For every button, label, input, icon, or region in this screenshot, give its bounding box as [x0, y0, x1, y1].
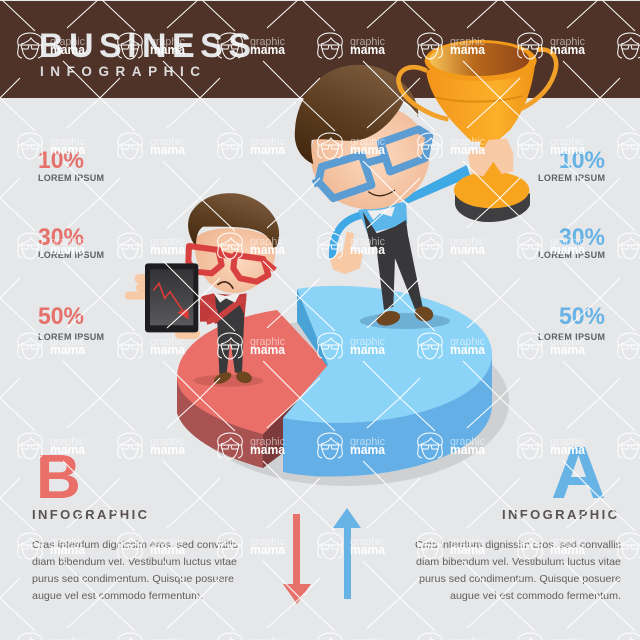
left stats: red: 10%: [38, 147, 84, 174]
section A text: augue vel est commodo fermentum.: [450, 590, 621, 602]
small boy shoes: [212, 370, 253, 386]
trophy base black: [455, 193, 530, 222]
trophy base gold: [454, 172, 529, 208]
small boy collar: [213, 293, 240, 303]
section B text: Cras interdum dignissim eros, sed convallis: [32, 539, 238, 551]
small boy sweater: [200, 293, 247, 324]
trophy cup rim: [425, 40, 537, 81]
right stats: blue: [538, 147, 605, 342]
small boy vest: [215, 295, 244, 324]
left stats: red: LOREM IPSUM: [38, 332, 104, 342]
big boy shadow: [360, 313, 450, 329]
big boy collar: [367, 207, 395, 220]
left stats: red: 30%: [38, 224, 84, 251]
right stats: blue: LOREM IPSUM: [538, 332, 605, 342]
small boy with tablet: [125, 193, 279, 387]
big boy head: [295, 65, 429, 209]
small boy head: [188, 193, 279, 293]
big boy face: [311, 104, 429, 209]
section A text: [415, 539, 621, 602]
section A text: diam bibendum vel. Vestibulum luctus vitae: [416, 556, 621, 568]
blue slice inner wall: [297, 289, 330, 368]
section A heading: INFOGRAPHIC: [502, 507, 618, 522]
trophy stem: [480, 137, 503, 174]
arrow: down red: [283, 514, 311, 604]
big boy fist: [468, 138, 513, 177]
section A heading: [502, 431, 618, 522]
arrow: up blue: [333, 508, 361, 599]
blue slice side: [283, 350, 492, 477]
big boy smile: [368, 190, 395, 196]
big boy vest: [363, 212, 409, 247]
blue slice top: [283, 286, 492, 423]
section A text: Cras interdum dignissim eros, sed convallis: [415, 539, 621, 551]
big boy legs: [376, 237, 423, 310]
big boy hand: [330, 232, 363, 274]
red slice top: [177, 310, 328, 434]
small boy hair: [188, 193, 279, 249]
small boy glasses: [188, 246, 275, 282]
small boy shadow: [193, 375, 263, 387]
small boy face: [195, 228, 275, 293]
left stats: red: [38, 147, 104, 342]
title: INFOGRAPHIC: [40, 64, 200, 79]
section B text: diam bibendum vel. Vestibulum luctus vitae: [32, 556, 237, 568]
small boy legs: [217, 322, 244, 374]
section A text: purus sed condimentum. Quisque posuere: [419, 573, 621, 585]
section A heading: A: [551, 431, 606, 514]
tablet falling line: [153, 283, 189, 319]
trophy: [398, 40, 556, 222]
3D pie chart: [177, 286, 509, 486]
left stats: red: 50%: [38, 303, 84, 330]
right stats: blue: LOREM IPSUM: [538, 250, 605, 260]
right stats: blue: 10%: [559, 147, 605, 174]
small boy crossed arm: [200, 297, 245, 322]
header band: [0, 1, 640, 98]
trophy cup: [426, 57, 536, 142]
left stats: red: LOREM IPSUM: [38, 250, 104, 260]
right stats: blue: 30%: [559, 224, 605, 251]
big boy with trophy: [295, 40, 556, 329]
big boy shoes: [375, 304, 435, 328]
big boy glasses: [313, 129, 429, 198]
section B text: augue vel est commodo fermentum.: [32, 590, 203, 602]
tablet: [145, 263, 198, 332]
small boy frown: [217, 282, 233, 289]
section B heading: [32, 443, 148, 522]
trophy cup band: [435, 96, 522, 102]
section B heading: INFOGRAPHIC: [32, 507, 148, 522]
big boy raised arm: [402, 165, 471, 203]
right stats: blue: 50%: [559, 303, 605, 330]
right stats: blue: LOREM IPSUM: [538, 173, 605, 183]
section B text: purus sed condimentum. Quisque posuere: [32, 573, 234, 585]
section B heading: B: [36, 443, 81, 512]
pie shadow: [185, 318, 509, 486]
red slice cut face: [263, 397, 300, 468]
left stats: red: LOREM IPSUM: [38, 173, 104, 183]
tablet screen: [150, 269, 193, 325]
trophy handles: [398, 49, 556, 119]
title: BUSINESS: [39, 27, 251, 65]
small boy fingers: [125, 274, 200, 339]
section B text: [32, 539, 238, 602]
big boy left arm: [333, 215, 362, 258]
red slice side: [177, 375, 263, 468]
big boy shirt: [358, 202, 407, 233]
big boy hair: [295, 65, 418, 164]
trophy cup interior: [429, 43, 529, 76]
